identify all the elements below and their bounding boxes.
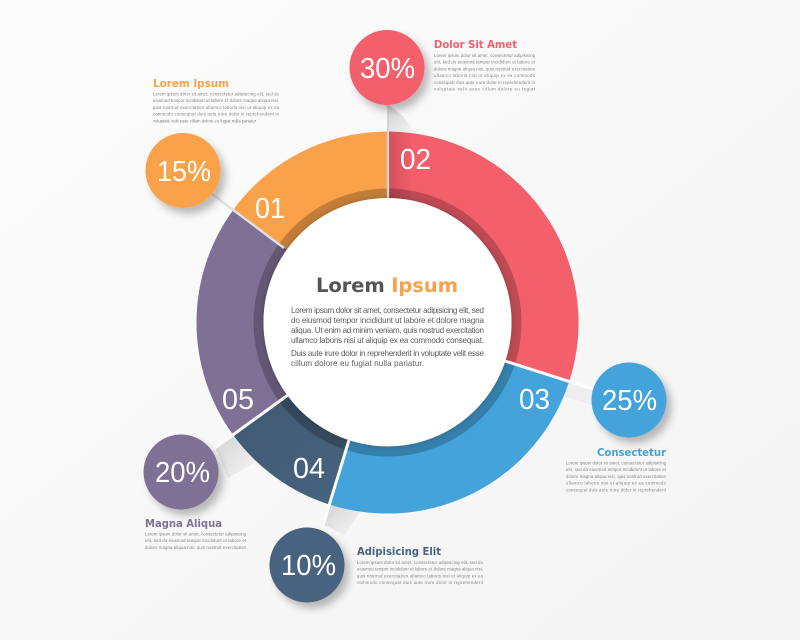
segment 03: blue <box>328 361 569 514</box>
segment numbers: 05 <box>222 384 254 416</box>
connector: 15% <box>212 194 284 248</box>
text block: Magna Aliqua: dolore magna aliqua nisi, quis nostrud exercitation <box>145 545 247 550</box>
text block: Consectetur: Lorem ipsum dolor sit amet, consectetur adipisicing <box>566 460 667 466</box>
text block: Dolor Sit Amet: consequat duis aute irure dolor in reprehenderit in <box>434 80 536 85</box>
segment 05: purple <box>196 210 287 435</box>
center text block: do eiusmod tempor incididunt ut labore et dolore magna <box>291 316 484 325</box>
text block: Dolor Sit Amet <box>434 39 536 92</box>
text block: Lorem Ipsum: Lorem ipsum dolor sit amet, consectetur adipisicing elit, sed do <box>153 92 280 96</box>
badge: 20%: 20% <box>155 457 210 489</box>
badge: 30% <box>350 30 424 105</box>
center title: Lorem Ipsum <box>316 274 458 297</box>
segment 01: orange <box>233 132 388 250</box>
text block: Consectetur <box>566 447 667 492</box>
text block: Consectetur: elit, sed do eiusmod tempor incididunt ut labore et <box>566 467 667 472</box>
text block: Consectetur: dolore magna aliqua nisi, quis nostrud exercitation <box>566 474 667 479</box>
text block: Lorem Ipsum: eiusmod tempor incididunt ut labore et dolore magna aliqua nisi, <box>153 98 279 103</box>
badge: 30%: 30% <box>360 53 415 85</box>
badge: 15%: 15% <box>157 156 211 188</box>
text block: Consectetur: Consectetur <box>597 447 667 459</box>
text block: Magna Aliqua: Magna Aliqua <box>145 518 222 530</box>
badge: 10% <box>270 528 344 602</box>
connector: 10% <box>321 440 349 532</box>
center text block: cillum dolore eu fugiat nulla pariatur. <box>291 359 424 368</box>
connector: 30% <box>387 104 389 200</box>
text block: Adipisicing Elit: quis nostrud exercitation ullamco laboris nisi ut aliquip ex ea <box>357 573 484 578</box>
text block: Dolor Sit Amet: Lorem ipsum dolor sit amet, consectetur adipisicing <box>434 53 536 58</box>
text block: Dolor Sit Amet: ullamco laboris nisi ut aliquip ex ea commodo <box>434 73 536 78</box>
text block: Adipisicing Elit <box>357 546 484 585</box>
text block: Dolor Sit Amet: voluptate velit esse cillum dolore eu fugiat <box>434 86 536 92</box>
badge: 10%: 10% <box>281 550 336 582</box>
text block: Dolor Sit Amet: elit, sed do eiusmod tempor incididunt ut labore et <box>434 60 536 65</box>
text block: Consectetur: consequat duis aute irure dolor in reprehenderit <box>566 487 667 492</box>
segment numbers: 03 <box>519 384 550 416</box>
segment numbers <box>222 144 550 485</box>
donut chart <box>196 104 596 532</box>
text block: Dolor Sit Amet: Dolor Sit Amet <box>434 39 517 51</box>
segment numbers: 02 <box>400 144 431 176</box>
connector: 20% <box>212 395 288 450</box>
text block: Dolor Sit Amet: dolore magna aliqua nisi, quis nostrud exercitation <box>434 66 536 71</box>
segment numbers: 01 <box>255 193 285 225</box>
segment 04: navy <box>233 395 349 504</box>
text block: Lorem Ipsum <box>153 78 280 123</box>
segment numbers: 04 <box>293 453 325 485</box>
badge: 20% <box>144 434 218 510</box>
text block: Magna Aliqua: Lorem ipsum dolor sit amet, consectetur adipisicing <box>145 532 247 536</box>
inner dark ring <box>258 194 516 452</box>
text block: Magna Aliqua: elit, sed do eiusmod tempor incididunt ut labore et <box>145 538 247 543</box>
center text block: Duis aute irure dolor in reprehenderit in voluptate velit esse <box>291 349 484 358</box>
text block: Adipisicing Elit: Adipisicing Elit <box>357 546 441 558</box>
segment 02: red <box>387 130 579 382</box>
text block: Lorem Ipsum: commodo consequat duis aute irure dolor in reprehenderit in <box>153 112 280 117</box>
text block: Lorem Ipsum: voluptate velit esse cillum dolore eu fugiat nulla pariatur <box>153 118 257 123</box>
connector shadows <box>215 105 596 535</box>
center text block: aliqua. Ut enim ad minim veniam, quis nostrud exercitation <box>291 326 484 335</box>
center white circle <box>264 198 512 446</box>
center text block <box>291 274 484 368</box>
text block: Adipisicing Elit: eiusmod tempor incididunt ut labore et dolore magna aliqua nisi, <box>357 567 483 572</box>
connector: 25% <box>505 361 596 390</box>
text block: Magna Aliqua <box>145 518 247 550</box>
text block: Adipisicing Elit: Lorem ipsum dolor sit amet, consectetur adipisicing elit, sed do <box>357 560 484 565</box>
center text block: ullamco laboris nisi ut aliquip ex ea commodo consequat. <box>291 336 484 345</box>
text block: Lorem Ipsum: Lorem Ipsum <box>153 78 229 90</box>
badge: 25%: 25% <box>602 385 657 417</box>
badge: 25% <box>592 362 666 438</box>
center text block: Lorem ipsum dolor sit amet, consectetur adipisicing elit, sed <box>291 306 484 315</box>
text block: Adipisicing Elit: commodo consequat duis aute irure dolor in reprehenderit <box>357 580 484 585</box>
text block: Lorem Ipsum: quis nostrud exercitation ullamco laboris nisi ut aliquip ex ea <box>153 105 280 110</box>
text block: Consectetur: ullamco laboris nisi ut aliquip ex ea commodo <box>566 481 667 486</box>
badge: 15% <box>146 133 220 208</box>
